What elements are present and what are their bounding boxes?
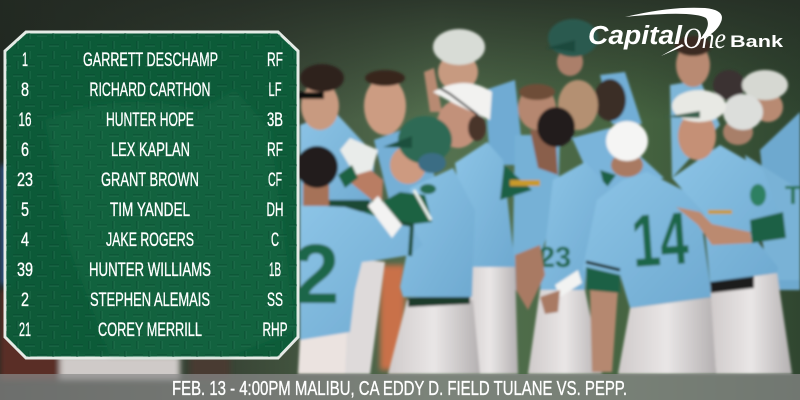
- game info bar: FEB. 13 - 4:00PM MALIBU, CA EDDY D. FIELD TULANE VS. PEPP.: [172, 378, 627, 400]
- row 7: JAKE ROGERS: [106, 230, 194, 251]
- player: white cap right of centre: [433, 83, 540, 374]
- row 5: GRANT BROWN: [101, 170, 199, 191]
- row 2: RICHARD CARTHON: [90, 80, 210, 101]
- row 8: [17, 260, 281, 281]
- row 3: 3B: [267, 110, 283, 131]
- row 7: [21, 230, 279, 251]
- Capital One Bank logo: Bank: [730, 32, 784, 51]
- row 3: 16: [18, 110, 32, 131]
- player: smiling in background: [364, 70, 440, 205]
- row 4: LEX KAPLAN: [111, 140, 190, 161]
- row 6: DH: [266, 200, 284, 221]
- row 4: [21, 140, 283, 161]
- row 3: HUNTER HOPE: [106, 110, 194, 131]
- row 10: RHP: [262, 320, 288, 341]
- row 1: RF: [267, 50, 283, 71]
- player: 14, white cap: 14: [629, 196, 691, 283]
- Capital One Bank logo: [588, 8, 784, 56]
- back row players: [424, 19, 800, 290]
- row 1: GARRETT DESCHAMP: [83, 50, 218, 71]
- row 4: RF: [267, 140, 283, 161]
- Capital One Bank logo: One: [683, 22, 726, 55]
- lineup panel: [5, 32, 298, 358]
- row 7: 4: [21, 230, 29, 251]
- player: 23: [515, 107, 608, 374]
- row 9: 2: [21, 290, 29, 311]
- row 2: LF: [268, 80, 282, 101]
- row 2: 8: [21, 80, 29, 101]
- player: centre, green helmet and 'T' jersey: [363, 116, 480, 374]
- player: 14, white cap: [583, 121, 716, 374]
- player: smiling, jersey with mascot: [664, 90, 792, 374]
- row 10: COREY MERRILL: [98, 320, 202, 341]
- row 6: TIM YANDEL: [110, 200, 190, 221]
- row 9: SS: [267, 290, 283, 311]
- row 4: 6: [21, 140, 29, 161]
- player: back number 2: [293, 146, 423, 374]
- row 9: [21, 290, 283, 311]
- row 5: 23: [17, 170, 33, 191]
- row 9: STEPHEN ALEMAIS: [90, 290, 210, 311]
- row 10: [19, 320, 288, 341]
- row 5: CF: [268, 170, 282, 191]
- row 6: 5: [21, 200, 29, 221]
- row 5: [17, 170, 282, 191]
- row 6: [21, 200, 284, 221]
- row 8: HUNTER WILLIAMS: [89, 260, 211, 281]
- row 8: 1B: [269, 260, 281, 281]
- row 10: 21: [19, 320, 31, 341]
- logo swoosh: [625, 8, 722, 56]
- player: 23: 23: [539, 242, 571, 274]
- row 8: 39: [17, 260, 33, 281]
- row 1: 1: [22, 50, 28, 71]
- row 3: [18, 110, 283, 131]
- raised hand and wristband: [338, 138, 402, 238]
- player: back number 2: 2: [293, 227, 339, 321]
- row 7: C: [271, 230, 279, 251]
- player: sunglasses: [298, 64, 375, 215]
- Capital One Bank logo: Capital: [588, 22, 683, 50]
- game info bar: [0, 374, 800, 400]
